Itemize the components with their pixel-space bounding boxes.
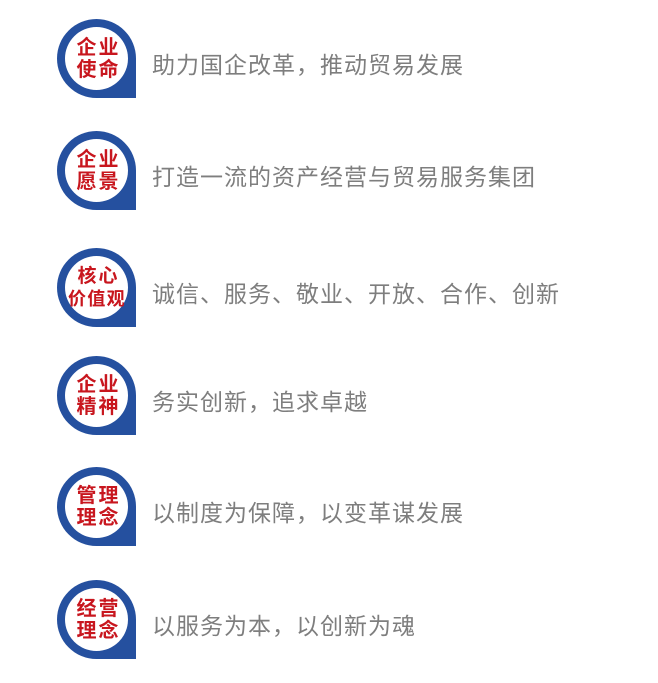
icon: badge 核心价值观: 核心 xyxy=(77,266,120,287)
icon: badge 经营理念: 经营 xyxy=(76,598,120,620)
icon: badge 企业精神: 企业 xyxy=(76,374,120,396)
item: 企业使命 xyxy=(57,19,464,98)
icon: badge 管理理念 xyxy=(57,467,136,546)
icon: badge 企业愿景: 企业 xyxy=(76,149,120,171)
icon: badge 经营理念: 理念 xyxy=(76,620,120,642)
text: 核心价值观: 诚信、服务、敬业、开放、合作、创新 xyxy=(152,281,560,307)
text: 管理理念: 以制度为保障，以变革谋发展 xyxy=(152,500,464,526)
icon: badge 经营理念 xyxy=(57,580,136,659)
icon: badge 企业愿景 xyxy=(57,131,136,210)
icon: badge 企业使命: 企业 xyxy=(76,37,120,59)
icon: badge 核心价值观: 价值观 xyxy=(68,289,126,309)
icon: badge 企业愿景: 愿景 xyxy=(76,171,120,193)
text: 企业精神: 务实创新，追求卓越 xyxy=(152,389,368,415)
icon: badge 管理理念: 理念 xyxy=(76,507,120,529)
item: 管理理念 xyxy=(57,467,464,546)
icon: badge 企业使命: 使命 xyxy=(76,59,120,81)
text: 经营理念: 以服务为本，以创新为魂 xyxy=(152,613,416,639)
icon: badge 企业使命 xyxy=(57,19,136,98)
item: 企业愿景 xyxy=(57,131,536,210)
icon: badge 企业精神: 精神 xyxy=(76,396,120,418)
item: 核心价值观 xyxy=(57,248,560,327)
item: 经营理念 xyxy=(57,580,416,659)
text: 企业愿景: 打造一流的资产经营与贸易服务集团 xyxy=(152,164,536,190)
icon: badge 核心价值观 xyxy=(57,248,136,327)
text: 企业使命: 助力国企改革，推动贸易发展 xyxy=(152,52,464,78)
icon: badge 企业精神 xyxy=(57,356,136,435)
item: 企业精神 xyxy=(57,356,368,435)
icon: badge 管理理念: 管理 xyxy=(76,485,120,507)
